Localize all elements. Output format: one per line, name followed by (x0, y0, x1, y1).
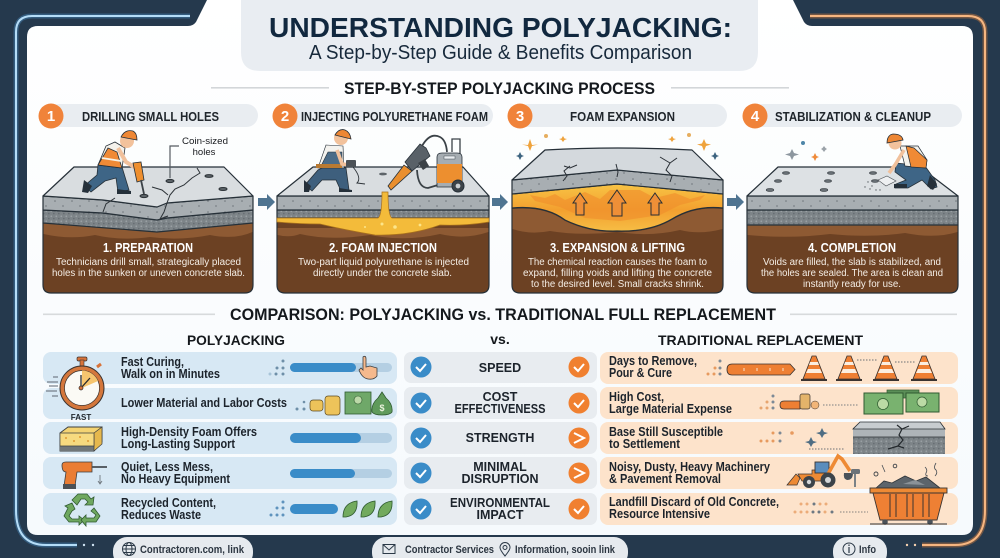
row: environmental impact: ENVIRONMENTAL (450, 496, 550, 510)
row: fast curing: Walk on in Minutes (121, 367, 220, 381)
column heading: polyjacking: POLYJACKING (187, 332, 285, 348)
step 3 header (508, 104, 727, 128)
footer pill: website (113, 537, 253, 558)
column heading: vs: vs. (490, 331, 510, 347)
row: days: Pour & Cure (609, 366, 672, 380)
blue glow frame line (16, 16, 190, 546)
row: fast curing (43, 352, 397, 384)
row: base: to Settlement (609, 437, 681, 451)
injected foam (277, 192, 489, 235)
traffic cones (801, 356, 937, 381)
step 2 caption (298, 241, 469, 279)
step 1 caption: Technicians drill small, strategically placed (56, 257, 241, 268)
step 3 header: 3 (516, 108, 524, 125)
row: high cost: Large Material Expense (609, 402, 732, 416)
title: UNDERSTANDING POLYJACKING: (269, 12, 732, 43)
footer pill: services: Contractor Services (405, 544, 494, 556)
row: recycled (43, 493, 397, 526)
step 2 caption: Two-part liquid polyurethane is injected (298, 257, 469, 268)
step 4 caption: 4. COMPLETION (808, 241, 896, 255)
callout: coin-sized holes: Coin-sized (182, 136, 228, 147)
column heading: traditional replacement: TRADITIONAL REPLACEMENT (658, 332, 863, 348)
lift arrows (573, 190, 662, 216)
step 3 caption: 3. EXPANSION & LIFTING (550, 241, 685, 255)
sparkles (785, 141, 827, 161)
row: high density foam: Long-Lasting Support (121, 437, 236, 451)
step 2 header: INJECTING POLYURETHANE FOAM (301, 110, 488, 124)
step 3 caption: The chemical reaction causes the foam to (528, 257, 707, 268)
panel: step 2 slab (277, 130, 489, 293)
panel: step 4 slab (747, 134, 958, 293)
step 2 caption: directly under the concrete slab. (313, 268, 452, 279)
cracked slab (853, 422, 945, 454)
row: speed: SPEED (479, 361, 521, 375)
step 4 caption: the holes are sealed. The area is clean and (761, 268, 943, 279)
icon: backhoe (787, 456, 860, 488)
panel: polyjacking column (43, 352, 397, 526)
icon: stopwatch: FAST (71, 413, 91, 422)
row: noisy: Noisy, Dusty, Heavy Machinery (609, 460, 770, 474)
step 4 header: STABILIZATION & CLEANUP (775, 110, 931, 124)
worker with control (304, 130, 365, 192)
row: speed (404, 352, 597, 383)
icon: envelope (383, 544, 395, 554)
step 3 caption: to the desired level. Small cracks shrink. (531, 279, 704, 290)
step 3 caption (523, 241, 712, 290)
row: recycled: Reduces Waste (121, 508, 201, 522)
title card (241, 0, 758, 71)
step 1 header: DRILLING SMALL HOLES (82, 110, 219, 124)
row: minimal disruption (404, 457, 597, 489)
process section heading: STEP-BY-STEP POLYJACKING PROCESS (344, 79, 655, 98)
worker with drill (82, 131, 144, 194)
panel: step 1 slab (43, 131, 253, 293)
panel: step 3 slab (512, 133, 723, 293)
icon: recycle (64, 494, 100, 526)
arrow: step 3 to 4 (727, 194, 744, 210)
step 3 header: FOAM EXPANSION (570, 110, 675, 124)
row: fast curing: Fast Curing, (121, 355, 184, 369)
row: lower costs (43, 388, 397, 419)
row: lower costs: $ (379, 403, 385, 413)
row: high density foam: High-Density Foam Offers (121, 425, 257, 439)
step 3 caption: expand, filling voids and lifting the concrete (523, 268, 712, 279)
cracks (563, 157, 677, 182)
step 1 caption (52, 241, 245, 279)
row: recycled: Recycled Content, (121, 496, 216, 510)
panel: traditional column (600, 352, 958, 525)
row: quiet: Quiet, Less Mess, (121, 460, 213, 474)
row: landfill (600, 493, 958, 525)
footer pill: info: Info (859, 544, 876, 556)
subtitle: A Step-by-Step Guide & Benefits Comparison (309, 42, 692, 64)
step 2 caption: 2. FOAM INJECTION (329, 241, 437, 255)
arrow: step 1 to 2 (258, 194, 275, 210)
row: landfill: Landfill Discard of Old Concrete, (609, 495, 779, 509)
icon: location pin (500, 542, 510, 556)
row: base (600, 422, 958, 454)
row: landfill: Resource Intensive (609, 507, 710, 521)
row: environmental impact: IMPACT (476, 508, 524, 522)
icon: globe (122, 542, 136, 556)
row: base: Base Still Susceptible (609, 425, 723, 439)
row: minimal disruption: DISRUPTION (461, 472, 539, 486)
row: strength (404, 422, 597, 454)
callout: coin-sized holes (170, 136, 228, 178)
step 4 caption: instantly ready for use. (803, 279, 901, 290)
comparison heading: COMPARISON: POLYJACKING vs. TRADITIONAL FULL REPLACEMENT (230, 305, 777, 324)
step 4 caption: Voids are filled, the slab is stabilized, and (763, 257, 941, 268)
panel: criteria column (404, 352, 597, 525)
row: cost effectiveness: EFFECTIVENESS (454, 402, 546, 416)
step 1 caption: holes in the sunken or uneven concrete slab. (52, 268, 245, 279)
step 1 header (38, 104, 258, 128)
orange glow frame line (810, 16, 985, 546)
row: cost effectiveness: COST (483, 390, 518, 404)
footer pill: website: Contractoren.com, link (140, 544, 245, 556)
row: minimal disruption: MINIMAL (473, 460, 527, 474)
row: days (600, 352, 958, 384)
step 2 header: 2 (281, 108, 289, 125)
icon: dumpster (870, 463, 947, 525)
bills (864, 390, 939, 414)
footer pill: info (833, 537, 887, 558)
step 1 header: 1 (47, 108, 55, 125)
cracks and holes (103, 168, 227, 219)
row: noisy (600, 456, 958, 489)
step 4 header (742, 104, 962, 128)
step 4 caption (761, 241, 943, 290)
row: noisy: & Pavement Removal (609, 472, 721, 486)
sealed holes (766, 172, 878, 191)
row: days: Days to Remove, (609, 354, 697, 368)
callout: coin-sized holes: holes (193, 147, 216, 158)
row: high cost (600, 387, 958, 419)
sparkles (516, 133, 719, 160)
row: quiet (43, 457, 397, 489)
arrow: step 2 to 3 (492, 194, 508, 210)
worker cleaning up (864, 134, 937, 191)
row: environmental impact (404, 493, 597, 525)
step 1 caption: 1. PREPARATION (103, 241, 193, 255)
footer pill: services: Information, sooin link (515, 544, 616, 556)
footer pill: services (372, 537, 628, 558)
row: cost effectiveness (404, 387, 597, 419)
step 4 header: 4 (751, 108, 760, 125)
row: lower costs: Lower Material and Labor Costs (121, 396, 287, 410)
row: high density foam (43, 422, 397, 454)
row: quiet: No Heavy Equipment (121, 472, 231, 486)
injection gun and pump (379, 136, 464, 192)
icon: info (843, 543, 855, 555)
step 2 header (272, 104, 493, 128)
row: strength: STRENGTH (466, 431, 534, 445)
row: high cost: High Cost, (609, 390, 664, 404)
icon: stopwatch (46, 357, 104, 422)
